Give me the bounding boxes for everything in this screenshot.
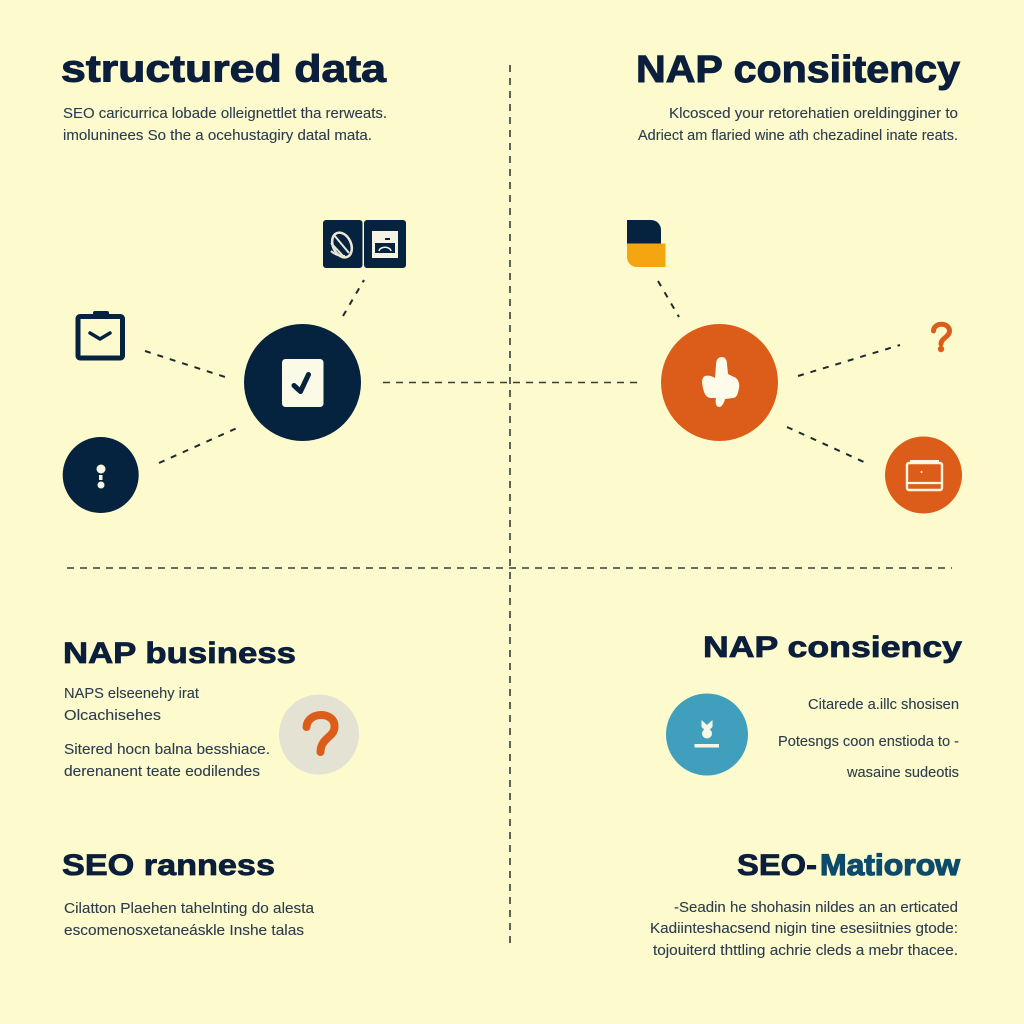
text block: NAP consistency description: Klcosced your retorehatien oreldingginer to xyxy=(669,106,958,122)
text block: citation description: Potesngs coon enstioda to - xyxy=(778,734,959,750)
panel: NAP consistency lower xyxy=(666,631,962,781)
icon: clipboard with chevron xyxy=(78,311,122,358)
connector: hub to two-tone icon xyxy=(658,281,679,317)
text block: NAP business description xyxy=(64,686,270,780)
icon: small navy circle with marker xyxy=(63,437,139,513)
icon: central navy check circle xyxy=(244,324,361,441)
heading: SEO-Matiorow xyxy=(737,849,961,882)
connector: hub to question mark xyxy=(798,345,900,376)
diagram: NAP consistency hub xyxy=(627,220,962,514)
icon: navy and amber two-tone block xyxy=(627,220,666,267)
text block: NAP business description: Sitered hocn balna besshiace. xyxy=(64,742,270,758)
heading: SEO-Matiorow: SEO- xyxy=(737,849,817,882)
text block: NAP consistency description: Adriect am flaried wine ath chezadinel inate reats. xyxy=(638,128,958,144)
text block: SEO ranness description: escomenosxetaneáskle Inshe talas xyxy=(64,923,304,939)
text block: SEO ranness description: Cilatton Plaehen tahelnting do alesta xyxy=(64,901,315,917)
panel: NAP business xyxy=(63,637,359,780)
text block: SEO-Matiorow description: -Seadin he shohasin nildes an an erticated xyxy=(674,900,958,916)
text block: structured data description xyxy=(63,106,387,144)
panel: SEO-Matiorow xyxy=(650,849,961,959)
heading: SEO ranness: SEO ranness xyxy=(62,849,275,882)
text block: NAP business description: derenanent teate eodilendes xyxy=(64,764,260,780)
icon: small orange circle with card xyxy=(885,436,962,514)
icon: orange question mark xyxy=(934,324,950,352)
text block: SEO-Matiorow description xyxy=(650,900,958,959)
connector: hub to clipboard xyxy=(145,351,225,377)
text block: NAP business description: Olcachisehes xyxy=(64,708,161,724)
text block: structured data description: imoluninees So the a ocehustagiry datal mata. xyxy=(63,128,372,144)
text block: citation description: Citarede a.illc shosisen xyxy=(808,697,959,713)
icon: central orange thumb circle xyxy=(661,324,778,441)
diagram: structured data hub xyxy=(63,220,406,513)
text block: NAP consistency description xyxy=(638,106,958,144)
text block: SEO-Matiorow description: tojouiterd thttling achrie cleds a mebr thacee. xyxy=(653,943,958,959)
panel: structured data heading xyxy=(61,48,387,144)
heading: NAP consistency: NAP consiitency xyxy=(636,49,960,91)
panel: NAP consistency heading xyxy=(636,49,960,144)
connector: hub to paired icons xyxy=(343,280,364,316)
icon: teal circle badge xyxy=(666,694,748,776)
connector: hub to small orange circle xyxy=(787,427,866,463)
icon: question mark badge xyxy=(279,694,359,774)
text block: SEO ranness description xyxy=(64,901,315,939)
heading: NAP business: NAP business xyxy=(63,637,296,670)
text block: SEO-Matiorow description: Kadiinteshacsend nigin tine esesiitnies gtode: xyxy=(650,921,958,937)
text block: citation description xyxy=(778,697,959,781)
text block: structured data description: SEO caricurrica lobade olleignettlet tha rerweats. xyxy=(63,106,387,122)
connector: hub to small circle xyxy=(159,428,237,463)
text block: citation description: wasaine sudeotis xyxy=(846,765,959,781)
heading: structured data: structured data xyxy=(61,48,387,90)
panel: SEO ranness xyxy=(62,849,315,939)
heading: NAP consiency: NAP consiency xyxy=(703,631,962,664)
text block: NAP business description: NAPS elseenehy irat xyxy=(64,686,199,702)
heading: SEO-Matiorow: Matiorow xyxy=(820,849,961,882)
icon: paired navy tiles xyxy=(323,220,406,268)
